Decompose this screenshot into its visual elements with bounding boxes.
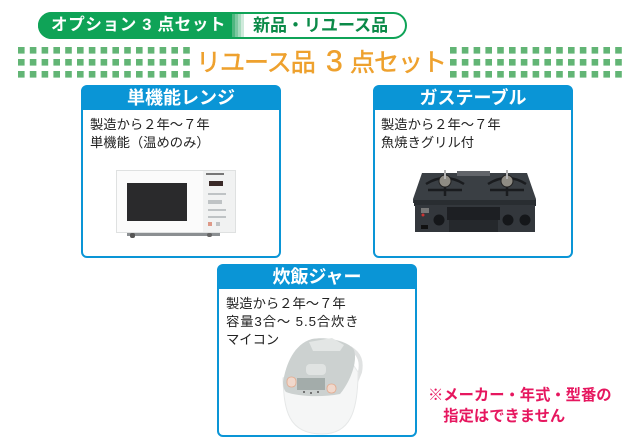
rice cooker heading: 炊飯ジャー: [272, 267, 362, 287]
rice cooker heading: [218, 265, 416, 289]
dot pattern left: [18, 47, 190, 78]
main heading: 3: [326, 45, 343, 78]
microwave heading: [82, 86, 280, 110]
gas table text: [381, 117, 501, 150]
rice cooker text: マイコン: [226, 332, 279, 347]
notice text: [428, 386, 612, 424]
main heading: リユース品: [196, 49, 315, 77]
rice cooker text: [226, 296, 359, 347]
icon: rice cooker: [282, 338, 363, 434]
main heading: [196, 45, 446, 78]
icon: gas stove: [413, 170, 536, 232]
pill left label: オプション 3 点セット: [51, 16, 226, 34]
main heading: 点セット: [350, 49, 446, 77]
microwave text: 製造から２年～７年: [90, 117, 210, 132]
option pill banner: [38, 12, 407, 39]
microwave heading: 単機能レンジ: [127, 88, 235, 108]
notice text: 指定はできません: [443, 408, 565, 424]
gas table heading: ガステーブル: [420, 88, 526, 108]
dot pattern right: [450, 47, 622, 78]
gas table text: 魚焼きグリル付: [381, 135, 474, 150]
notice text: ※メーカー・年式・型番の: [428, 387, 612, 404]
rice cooker text: 容量3合～ 5.5合炊き: [226, 314, 359, 329]
gas table heading: [374, 86, 572, 110]
icon: microwave: [116, 170, 236, 238]
panel: rice cooker: [217, 264, 417, 437]
gas table text: 製造から２年～７年: [381, 117, 501, 132]
microwave text: 単機能（温めのみ）: [90, 135, 210, 150]
panel: gas table: [373, 85, 573, 258]
microwave text: [90, 117, 210, 150]
panel: microwave: [81, 85, 281, 258]
rice cooker text: 製造から２年～７年: [226, 296, 346, 311]
pill right label: 新品・リユース品: [253, 16, 388, 35]
